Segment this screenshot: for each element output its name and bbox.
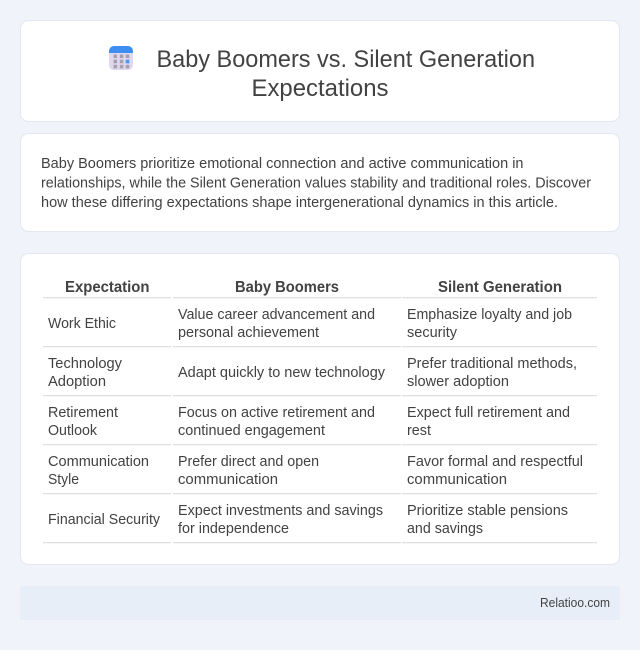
table row: work ethic: personal achievement [178,325,319,341]
table row: retirement outlook: Outlook [48,423,98,439]
table row: financial security: Financial Security [48,512,161,528]
text block: introduction [41,156,591,211]
table row: financial security: and savings [407,521,483,537]
table row: retirement outlook: Expect full retirement and [407,405,570,421]
panel: comparison table [20,254,620,564]
table row: communication style: Prefer direct and open [178,454,319,470]
table row: communication style: Favor formal and respectful [407,454,583,470]
heading [156,46,535,102]
table row: technology adoption: Technology [48,356,123,372]
table row: financial security: Prioritize stable pensions [407,503,568,519]
table row: technology adoption: Prefer traditional methods, [407,356,577,372]
table row: work ethic: Work Ethic [48,316,116,332]
panel: title card [20,20,620,122]
footer: Relatioo.com [540,596,610,610]
table row: work ethic [48,307,572,341]
table row: communication style: communication [178,472,278,488]
table header row: Baby Boomers [235,279,339,296]
table row: retirement outlook: Retirement [48,405,118,421]
table row: technology adoption [48,356,577,390]
icon: calendar [109,46,133,70]
table row: work ethic: Value career advancement and [178,307,375,323]
table row: retirement outlook: continued engagement [178,423,325,439]
heading: Expectations [252,75,388,102]
table row: retirement outlook: rest [407,423,431,439]
text block: introduction: relationships, while the Silent Generation values stability and traditional roles. Discover [41,176,591,192]
footer [20,586,620,620]
heading: Baby Boomers vs. Silent Generation [156,46,535,73]
table row: financial security: for independence [178,521,289,537]
table row: communication style: Style [48,472,79,488]
table row: communication style: Communication [48,454,149,470]
table header row [65,279,562,296]
table row: retirement outlook [48,405,570,439]
table row: technology adoption: Adoption [48,374,106,390]
table header row: Silent Generation [438,279,562,296]
table row: work ethic: security [407,325,458,341]
text block: introduction: Baby Boomers prioritize emotional connection and active communication in [41,156,524,172]
text block: introduction: how these differing expectations shape intergenerational dynamics in this article. [41,195,558,211]
table header row: Expectation [65,279,150,296]
table row: work ethic: Emphasize loyalty and job [407,307,572,323]
table row: retirement outlook: Focus on active retirement and [178,405,375,421]
table row: technology adoption: slower adoption [407,374,509,390]
table row: technology adoption: Adapt quickly to new technology [178,365,386,381]
table row: financial security [48,503,568,537]
table row: communication style [48,454,583,488]
table row: financial security: Expect investments and savings [178,503,383,519]
table row: communication style: communication [407,472,507,488]
panel: introduction [20,134,620,232]
